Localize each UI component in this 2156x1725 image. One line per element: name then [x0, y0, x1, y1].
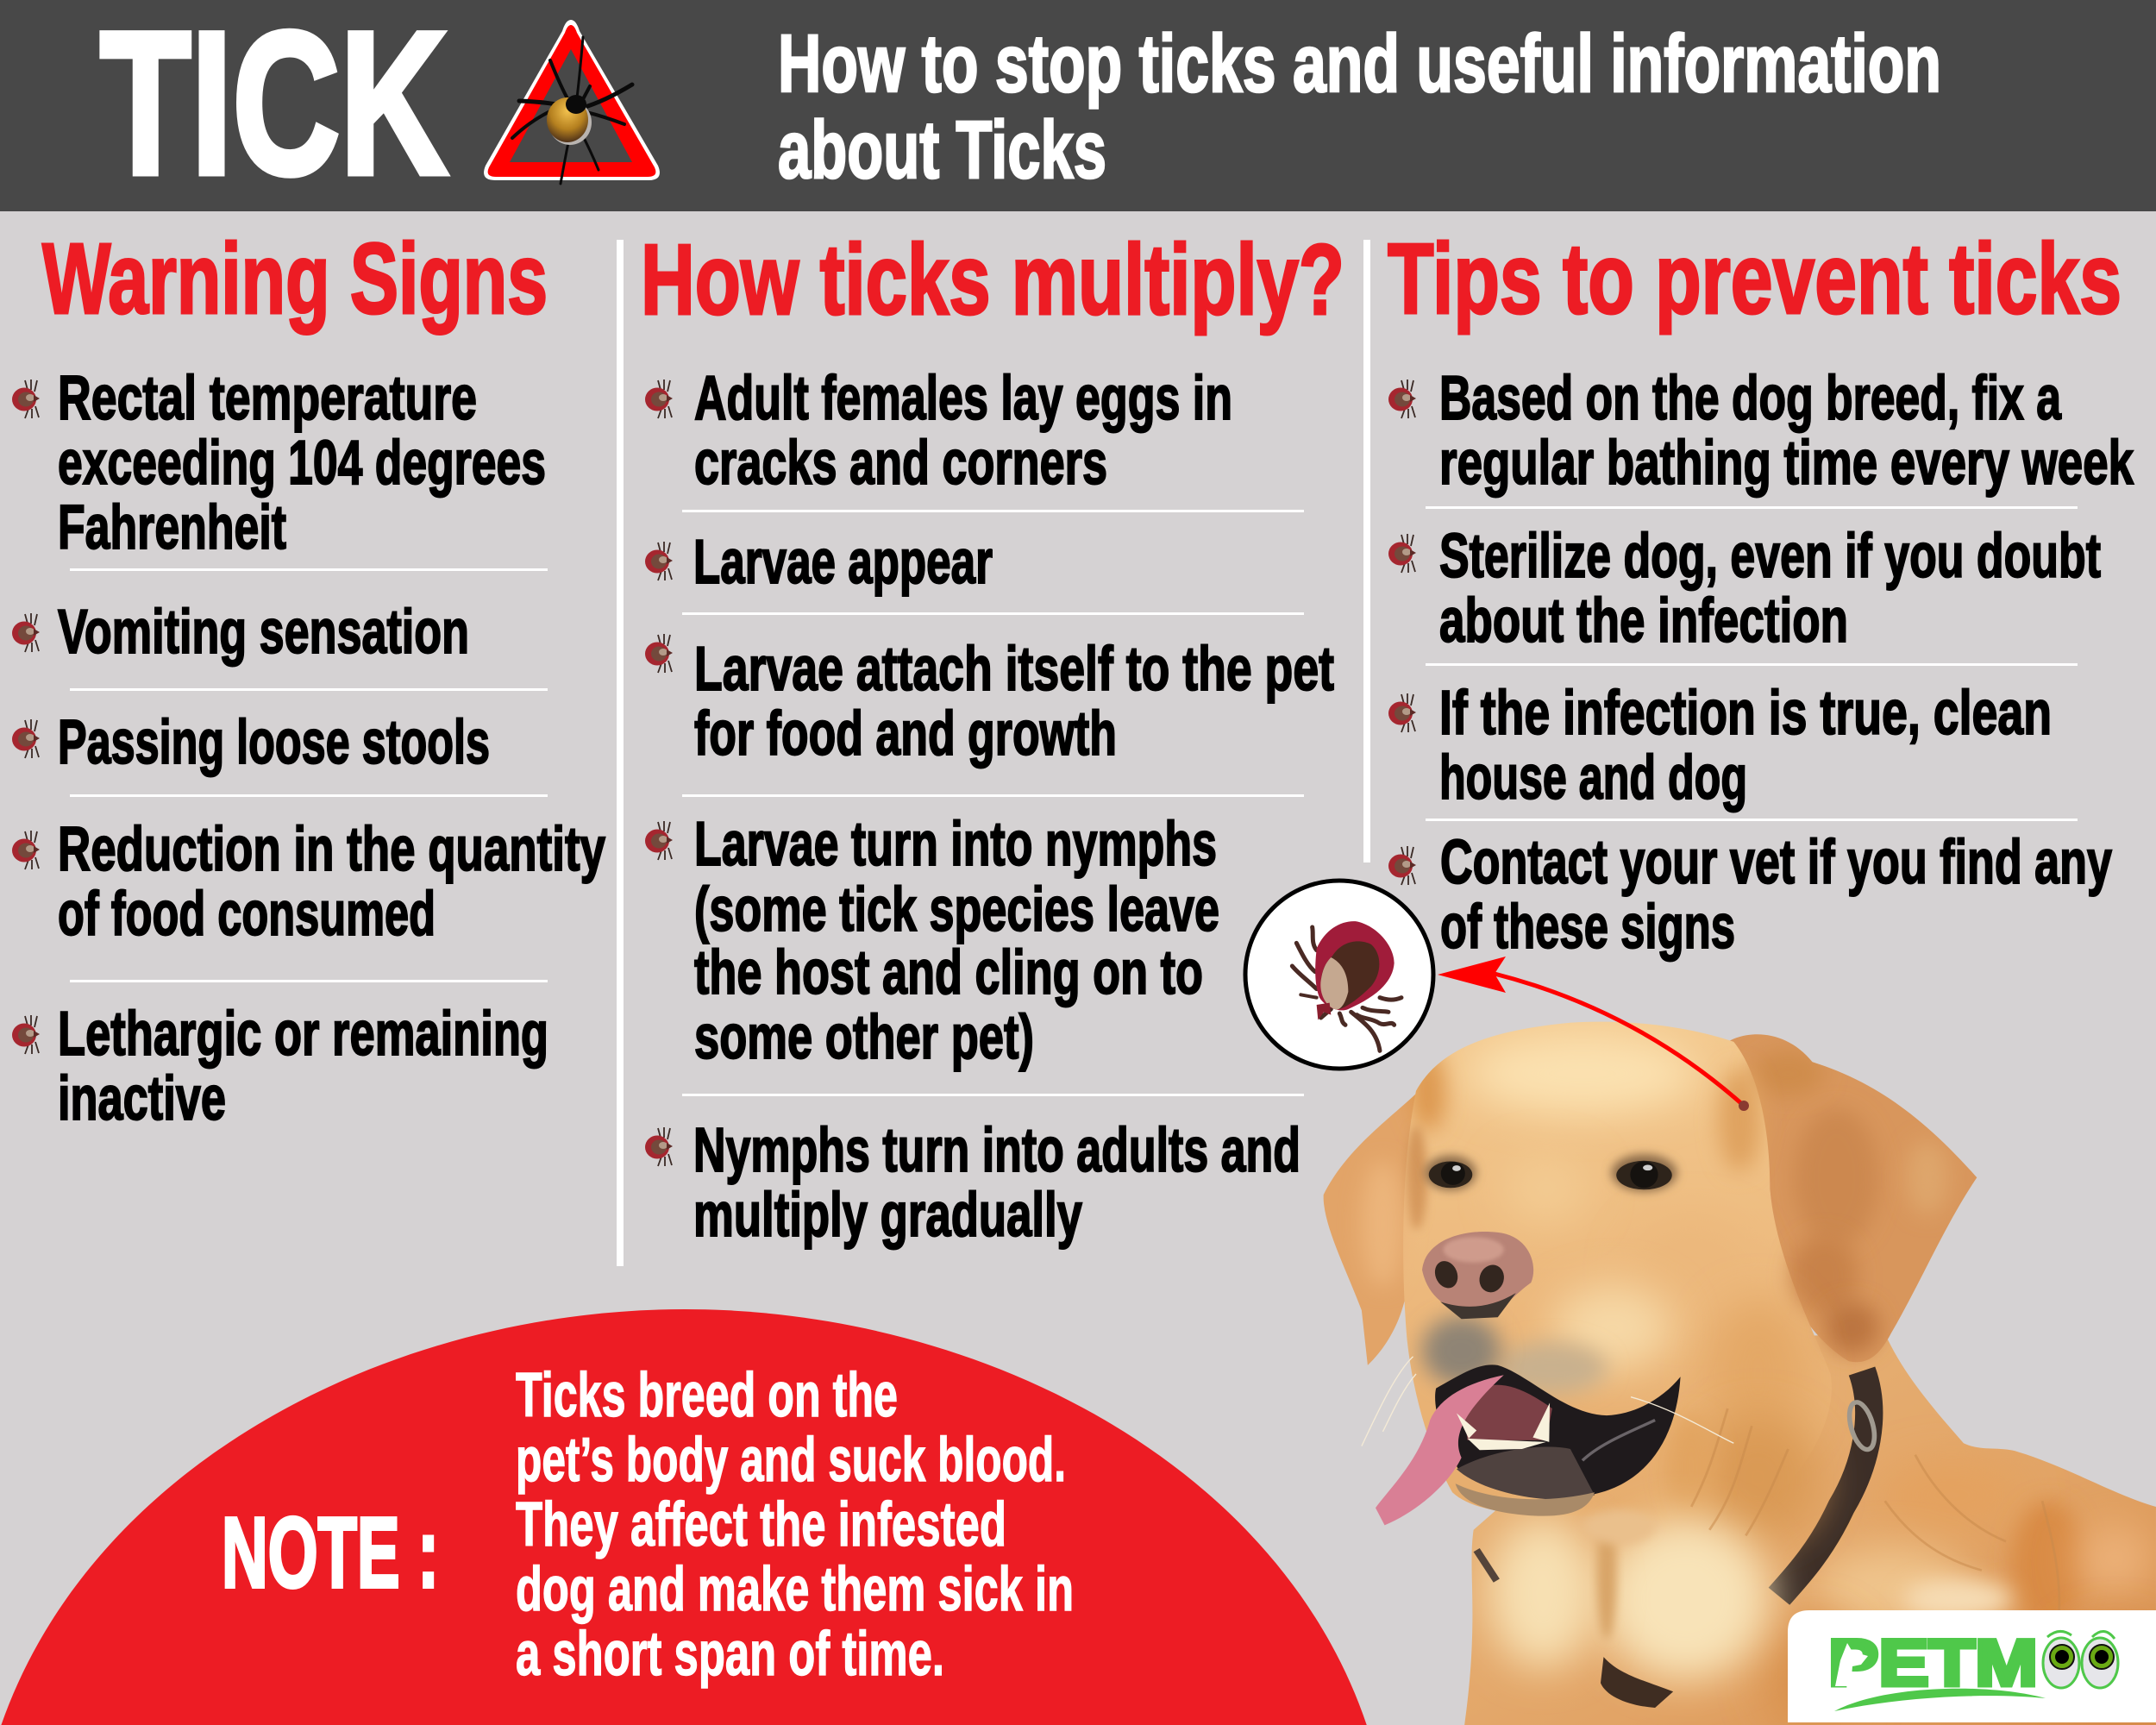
item: vet: [1388, 828, 2112, 962]
item: clean: house and dog: [1439, 743, 1747, 812]
arrow: from dog to tick: [1438, 957, 1749, 1111]
item: larvae appear: [645, 528, 993, 597]
note label: NOTE :: [222, 1496, 439, 1609]
logo dog silhouette: [1835, 1643, 1868, 1686]
mouth gloss: [1583, 1420, 1655, 1460]
head: [1403, 1022, 1832, 1521]
note text: dog and make them sick in: [516, 1555, 1074, 1624]
note text: Ticks breed on the: [516, 1361, 898, 1430]
item: adult females: cracks and corners: [694, 429, 1107, 498]
logo: PETMOO: PETM: [1828, 1627, 2038, 1700]
head and neck shading: [1362, 1033, 2059, 1708]
panel: how ticks multiply: [641, 223, 1344, 1250]
logo swoosh: [1834, 1689, 2046, 1711]
item: larvae appear: Larvae appear: [693, 528, 993, 597]
item: vomiting: [12, 598, 469, 667]
item: rectal temperature: [12, 364, 546, 562]
item: vomiting: Vomiting sensation: [58, 598, 469, 667]
item: loose stools: [12, 708, 490, 777]
column divider left: [617, 240, 624, 1266]
logo: PETMOO: [1788, 1610, 2156, 1722]
body shading: [1764, 1460, 2156, 1725]
heading: warning signs: Warning Signs: [42, 223, 548, 335]
item: lethargic: [12, 1000, 548, 1133]
item: nymphs: Larvae turn into nymphs: [694, 810, 1217, 879]
icon: warning triangle with tick: [484, 20, 660, 184]
dog illustration: [1324, 1022, 2156, 1725]
note: red callout: [0, 1309, 1369, 1725]
item: bathing: [1388, 364, 2134, 498]
item: adults: [645, 1116, 1300, 1250]
logo eyes: [2043, 1631, 2118, 1688]
item: rectal temperature: Fahrenheit: [58, 493, 286, 562]
item: lethargic: inactive: [58, 1064, 226, 1133]
heading: how ticks multiply: How ticks multiply?: [641, 223, 1344, 336]
item: lethargic: Lethargic or remaining: [58, 1000, 548, 1069]
note text: pet’s body and suck blood.: [516, 1426, 1066, 1495]
right ear: [1727, 1034, 1977, 1362]
item: sterilize: [1388, 522, 2101, 656]
item: adults: multiply gradually: [693, 1181, 1082, 1250]
item: reduced food: [12, 815, 605, 949]
panel: warning signs: [12, 223, 605, 1133]
item: adult females: Adult females lay eggs in: [694, 364, 1232, 433]
item: sterilize: about the infection: [1439, 586, 1848, 656]
right eye: [1612, 1154, 1677, 1191]
item: reduced food: Reduction in the quantity: [58, 815, 605, 884]
item: larvae attach: [645, 634, 1334, 768]
item: clean: [1388, 679, 2052, 812]
column divider right: [1363, 240, 1370, 862]
item: reduced food: of food consumed: [58, 880, 436, 949]
item: larvae attach: for food and growth: [694, 699, 1117, 768]
panel: tips to prevent ticks: [1388, 223, 2134, 962]
item: nymphs: [645, 810, 1219, 1072]
subtitle: about Ticks: [778, 104, 1106, 196]
item: nymphs: (some tick species leave: [694, 875, 1219, 944]
item: loose stools: Passing loose stools: [58, 708, 490, 777]
lower lip: [1457, 1447, 1595, 1500]
mouth: [1435, 1364, 1681, 1496]
item: nymphs: the host and cling on to: [694, 938, 1203, 1007]
note text: They affect the infested: [516, 1490, 1006, 1559]
item: adults: Nymphs turn into adults and: [693, 1116, 1300, 1185]
collar: [1779, 1371, 1879, 1596]
item: nymphs: some other pet): [694, 1003, 1034, 1072]
mouth interior: [1462, 1385, 1552, 1440]
item: rectal temperature: exceeding 104 degrees: [58, 429, 546, 498]
note text: [516, 1361, 1074, 1689]
whiskers: [1362, 1357, 1733, 1446]
item: rectal temperature: Rectal temperature: [58, 364, 477, 433]
chin: [1456, 1484, 1595, 1516]
note text: a short span of time.: [516, 1620, 944, 1689]
subtitle: [778, 18, 1941, 196]
item: larvae attach: Larvae attach itself to the pet: [694, 635, 1334, 704]
icon: tick magnified circle: [1245, 881, 1433, 1069]
tongue: [1376, 1375, 1504, 1525]
item: adult females: [645, 364, 1232, 498]
teeth: [1457, 1402, 1550, 1450]
nose: [1422, 1232, 1533, 1319]
header banner: [0, 0, 2156, 217]
left ear: [1324, 1091, 1420, 1365]
item: vet: of these signs: [1440, 893, 1735, 962]
left eye: [1426, 1156, 1476, 1190]
dog body: [1464, 1333, 2156, 1725]
